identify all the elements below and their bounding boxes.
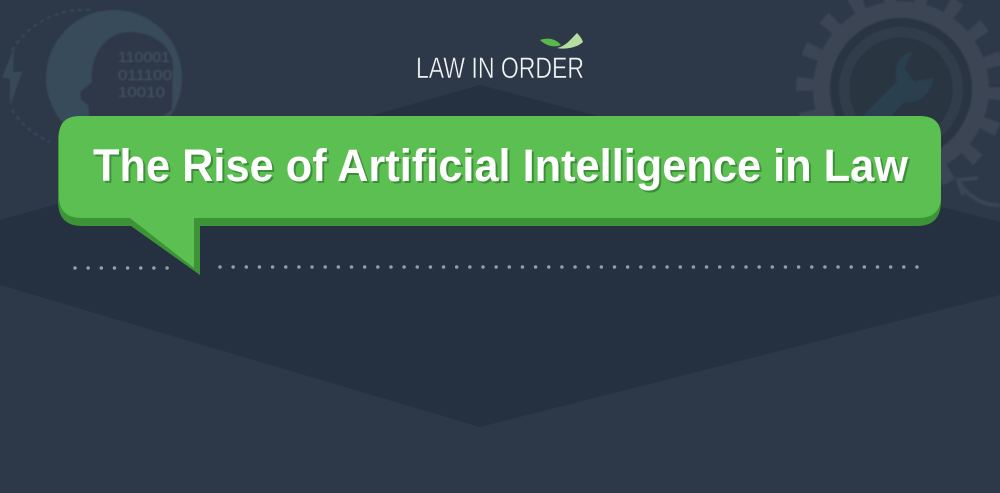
icon: head with binary code: 10010 xyxy=(118,84,165,101)
dotted line: right xyxy=(220,265,919,269)
icon: head with binary code xyxy=(2,10,182,146)
logo: Law in Order xyxy=(416,33,584,85)
bubble shadow xyxy=(58,116,941,275)
speech bubble title xyxy=(58,116,941,275)
icon: logo leaf xyxy=(540,33,583,49)
logo wordmark: LAW IN ORDER xyxy=(416,52,584,85)
dotted line: left xyxy=(75,266,170,270)
bubble face xyxy=(59,116,941,268)
icon: head with binary code: 110001 xyxy=(118,49,170,66)
title: The Rise of Artificial Intelligence in Law xyxy=(93,140,909,191)
icon: gear with wrench xyxy=(805,0,1000,205)
title shadow: The Rise of Artificial Intelligence in Law xyxy=(95,142,911,193)
icon: head with binary code: 011100 xyxy=(118,67,172,84)
